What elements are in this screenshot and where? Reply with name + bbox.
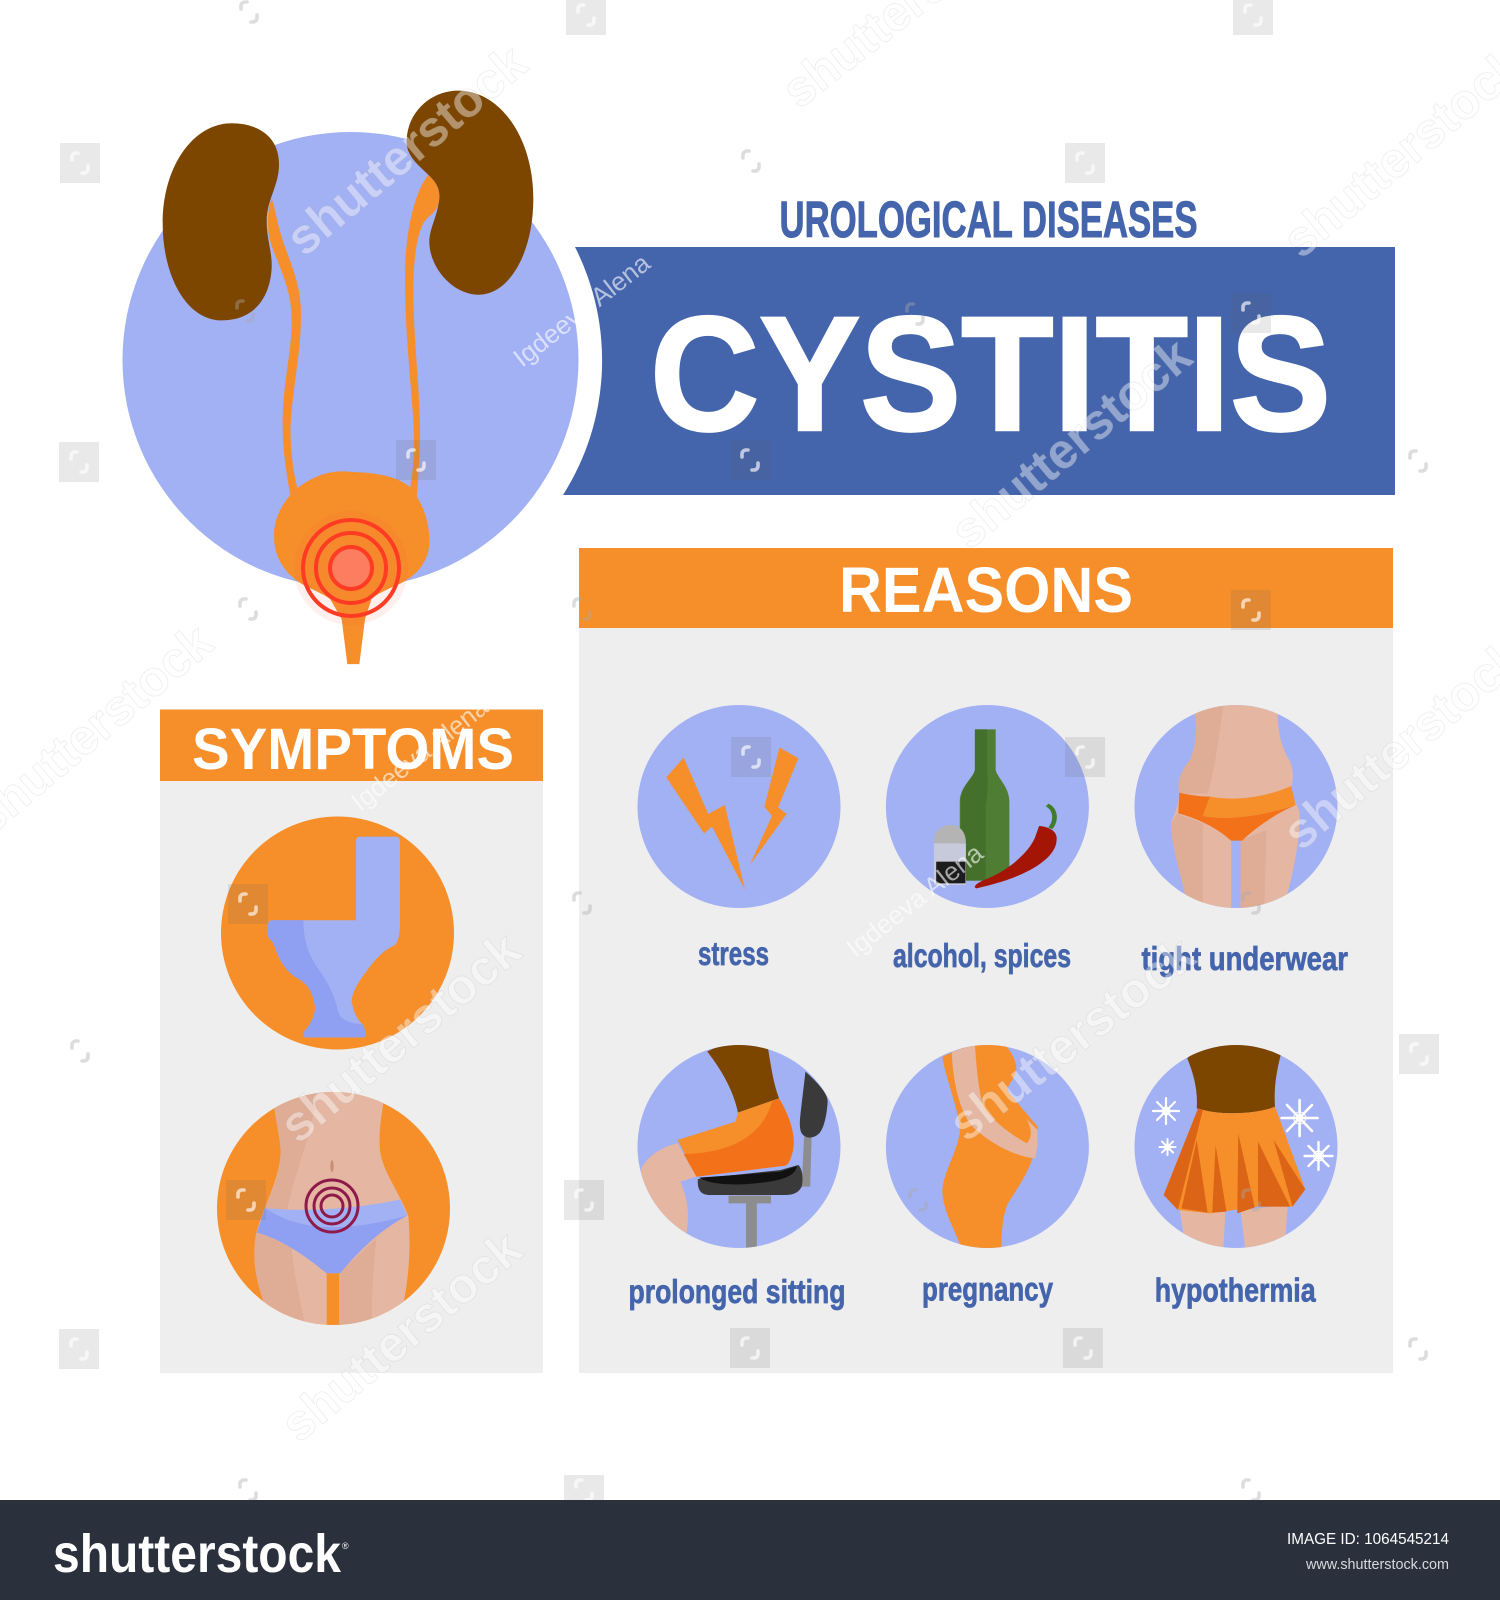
- text: Igdeeva Alena: [840, 837, 989, 963]
- torso: [707, 1045, 779, 1113]
- heading: urological diseases: UROLOGICAL DISEASES: [780, 191, 1198, 248]
- pain rings: [306, 1180, 358, 1232]
- text: Igdeeva Alena: [345, 691, 494, 817]
- reason: alcohol, spices: [886, 705, 1089, 974]
- reason: pregnancy: [886, 1043, 1089, 1308]
- heading: symptoms: SYMPTOMS: [192, 717, 514, 782]
- image id: IMAGE ID: 1064545214: [1287, 1531, 1449, 1548]
- reason: alcohol, spices: alcohol, spices: [893, 937, 1071, 974]
- icon: chili pepper: [1047, 805, 1055, 828]
- icon: toilet: [221, 816, 454, 1050]
- watermark text: shutterstock: [938, 926, 1205, 1152]
- panel: symptoms: [160, 710, 543, 1373]
- background circle: [122, 132, 578, 588]
- heading: reasons: REASONS: [839, 554, 1133, 626]
- reason: hypothermia: hypothermia: [1155, 1272, 1316, 1309]
- website: www.shutterstock.com: [1305, 1556, 1449, 1573]
- footer bar: [0, 1500, 1500, 1600]
- leg: [641, 1144, 696, 1234]
- footer bar: ®: [342, 1541, 349, 1551]
- urinary system illustration: [122, 91, 578, 664]
- reason: prolonged sitting: [628, 1045, 846, 1310]
- watermark text: shutterstock: [275, 34, 537, 266]
- icon: snowflakes: [1153, 1098, 1332, 1170]
- reason: pregnancy: pregnancy: [922, 1271, 1054, 1308]
- title banner: [563, 191, 1395, 495]
- reason: hypothermia: [1134, 1044, 1338, 1309]
- footer logo: shutterstock: [53, 1524, 342, 1584]
- chair: [729, 1137, 812, 1250]
- seat: [698, 1165, 803, 1195]
- reason: prolonged sitting: prolonged sitting: [628, 1273, 846, 1310]
- icon: abdominal pain: [217, 1090, 450, 1333]
- watermark text: shutterstock: [269, 921, 531, 1153]
- organs: [163, 91, 533, 664]
- icon: bottle: [960, 729, 1009, 881]
- watermark text: shutterstock: [940, 327, 1202, 559]
- reason: stress: stress: [698, 935, 769, 972]
- pain rings: [294, 511, 408, 625]
- title: cystitis: CYSTITIS: [650, 282, 1331, 465]
- text: Igdeeva Alena: [507, 247, 656, 373]
- watermark text: shutterstock: [270, 1220, 532, 1452]
- panel: reasons: [579, 548, 1393, 1373]
- reason: stress: [638, 705, 840, 972]
- shorts: [678, 1098, 794, 1177]
- reason: tight underwear: tight underwear: [1142, 940, 1348, 977]
- reason: tight underwear: [1134, 703, 1348, 977]
- icon: salt shaker: [934, 825, 966, 843]
